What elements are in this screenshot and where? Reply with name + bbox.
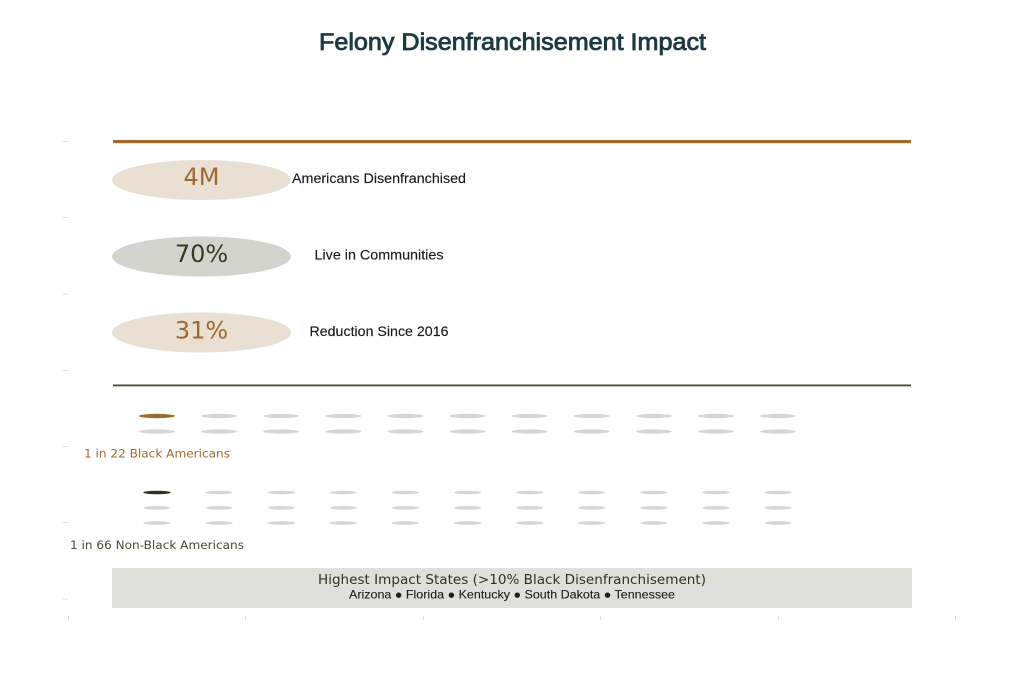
panel heading: Highest Impact States (>10% Black Disenfranchisement)	[318, 573, 706, 588]
stat: 31% reduction since 2016	[112, 312, 448, 352]
title: Felony Disenfranchisement Impact	[319, 29, 706, 56]
stat: 31% reduction since 2016: 31%	[175, 316, 228, 344]
stat: 4M Americans disenfranchised: Americans Disenfranchised	[292, 171, 466, 186]
middle divider	[113, 384, 911, 386]
label: 1 in 66: 1 in 66 Non-Black Americans	[70, 538, 244, 552]
state list: Arizona ● Florida ● Kentucky ● South Dakota ● Tennessee	[349, 588, 675, 602]
top divider	[113, 140, 911, 143]
highlighted marker: 1 of 66	[143, 491, 171, 494]
chart: 1 in 66 Non-Black Americans	[70, 491, 792, 552]
stat: 31% reduction since 2016: Reduction Since 2016	[310, 324, 448, 339]
panel: key statistics	[112, 160, 466, 352]
stat: 70% live in communities: 70%	[175, 240, 228, 268]
highlighted marker: 1 of 22	[139, 414, 175, 418]
stat: 4M Americans disenfranchised: 4M	[184, 163, 219, 191]
label: 1 in 22: 1 in 22 Black Americans	[84, 446, 230, 460]
stat: 4M Americans disenfranchised	[112, 160, 466, 200]
chart: 1 in 22 Black Americans	[84, 414, 796, 460]
stat: 70% live in communities: Live in Communities	[314, 248, 444, 262]
panel: highest impact states	[112, 568, 912, 608]
stat: 70% live in communities	[112, 236, 444, 276]
